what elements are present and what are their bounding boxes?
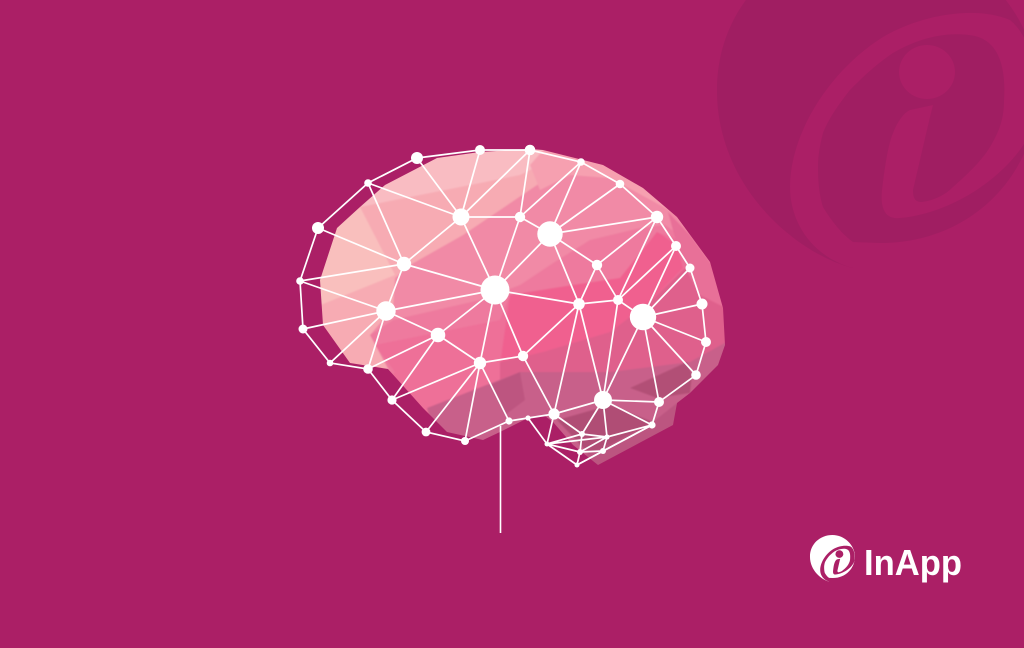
network connection lines	[300, 150, 706, 465]
logo icon	[810, 535, 855, 582]
watermark: large InApp logo	[717, 0, 1024, 268]
brain silhouette with faceted pink polygons	[320, 149, 725, 465]
InApp logo	[810, 535, 962, 583]
logo wordmark: InApp	[864, 542, 962, 583]
stem line below brain	[500, 426, 502, 533]
network nodes	[296, 145, 711, 467]
